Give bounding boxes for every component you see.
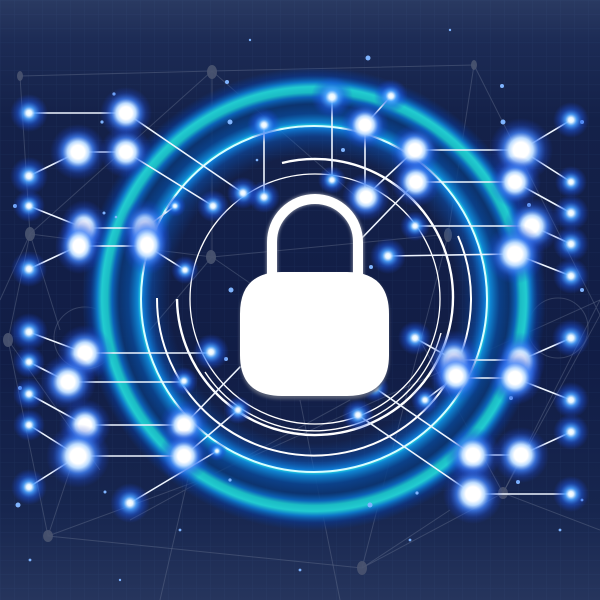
glowing nodes: right side [443,102,590,524]
glowing cyan rings disc [82,67,546,531]
icon: padlock [240,199,389,399]
glowing nodes: left side [10,87,172,523]
glowing nodes: ring and centre [158,76,482,482]
white circular arcs [157,159,471,456]
mesh nodes [3,60,508,575]
network connector lines [29,96,571,503]
inner bright ring [141,126,487,472]
